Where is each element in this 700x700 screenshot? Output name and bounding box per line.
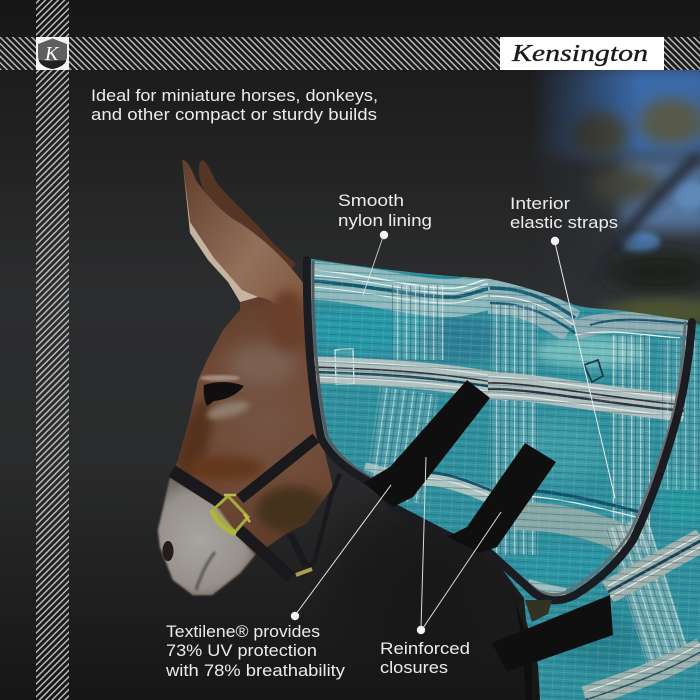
bottom band xyxy=(585,648,700,697)
tag on neck xyxy=(335,349,354,384)
head shape xyxy=(158,290,333,595)
buckle xyxy=(296,569,312,575)
callout: smooth nylon lining: Smooth xyxy=(338,191,404,210)
blurred tree photo background xyxy=(538,70,700,325)
intro text: and other compact or sturdy builds xyxy=(91,105,377,124)
callout: reinforced closures: Reinforced xyxy=(380,639,470,658)
neck main band xyxy=(312,370,510,388)
K shield logo: K xyxy=(44,43,60,65)
horizontal hatch stripe xyxy=(0,37,700,70)
Kensington logo: Kensington xyxy=(511,41,648,67)
callout: reinforced closures xyxy=(380,457,501,677)
right lower band xyxy=(608,540,700,592)
right lower verticals xyxy=(612,517,686,663)
eye xyxy=(204,382,244,406)
vertical hatch stripe xyxy=(36,0,69,700)
Kensington logo xyxy=(500,37,664,70)
plaid blanket fabric xyxy=(300,250,700,700)
head shading xyxy=(171,290,328,534)
intro text xyxy=(91,86,378,124)
floor shadow under blanket xyxy=(305,475,555,685)
rear main band xyxy=(488,386,684,408)
callout: interior elastic straps: elastic straps xyxy=(510,213,618,232)
lower neck band xyxy=(364,462,388,474)
small logo on blanket xyxy=(584,360,603,382)
K shield logo xyxy=(36,37,69,70)
ear inner rim xyxy=(184,172,258,302)
fine weave xyxy=(300,250,700,700)
callout: smooth nylon lining: nylon lining xyxy=(338,211,432,230)
mid rear band xyxy=(515,516,628,542)
callout: textilene: with 78% breathability xyxy=(165,661,346,680)
callout: interior elastic straps: Interior xyxy=(510,194,570,213)
brass ring xyxy=(211,495,250,534)
soft colour zones xyxy=(316,312,418,349)
intro text: Ideal for miniature horses, donkeys, xyxy=(91,86,378,105)
callout: reinforced closures: closures xyxy=(380,658,448,677)
nostril xyxy=(162,541,174,561)
halter straps xyxy=(172,438,340,577)
neck top pale band xyxy=(308,280,496,298)
rear top band xyxy=(488,297,572,326)
callout: textilene xyxy=(165,485,391,680)
neck verticals xyxy=(392,285,444,360)
mouth line xyxy=(196,552,215,590)
callout: interior elastic straps xyxy=(510,194,618,498)
black closure straps xyxy=(363,380,613,700)
blanket black binding xyxy=(307,260,692,600)
rear verticals xyxy=(490,305,538,555)
donkey head xyxy=(158,160,340,595)
callout: textilene: 73% UV protection xyxy=(166,641,317,660)
bottom rear pale xyxy=(528,583,566,592)
muzzle xyxy=(158,478,255,595)
callout: textilene: Textilene® provides xyxy=(166,622,320,641)
callout: smooth nylon lining xyxy=(338,191,432,295)
back ear xyxy=(199,160,296,275)
front ear xyxy=(182,160,308,335)
